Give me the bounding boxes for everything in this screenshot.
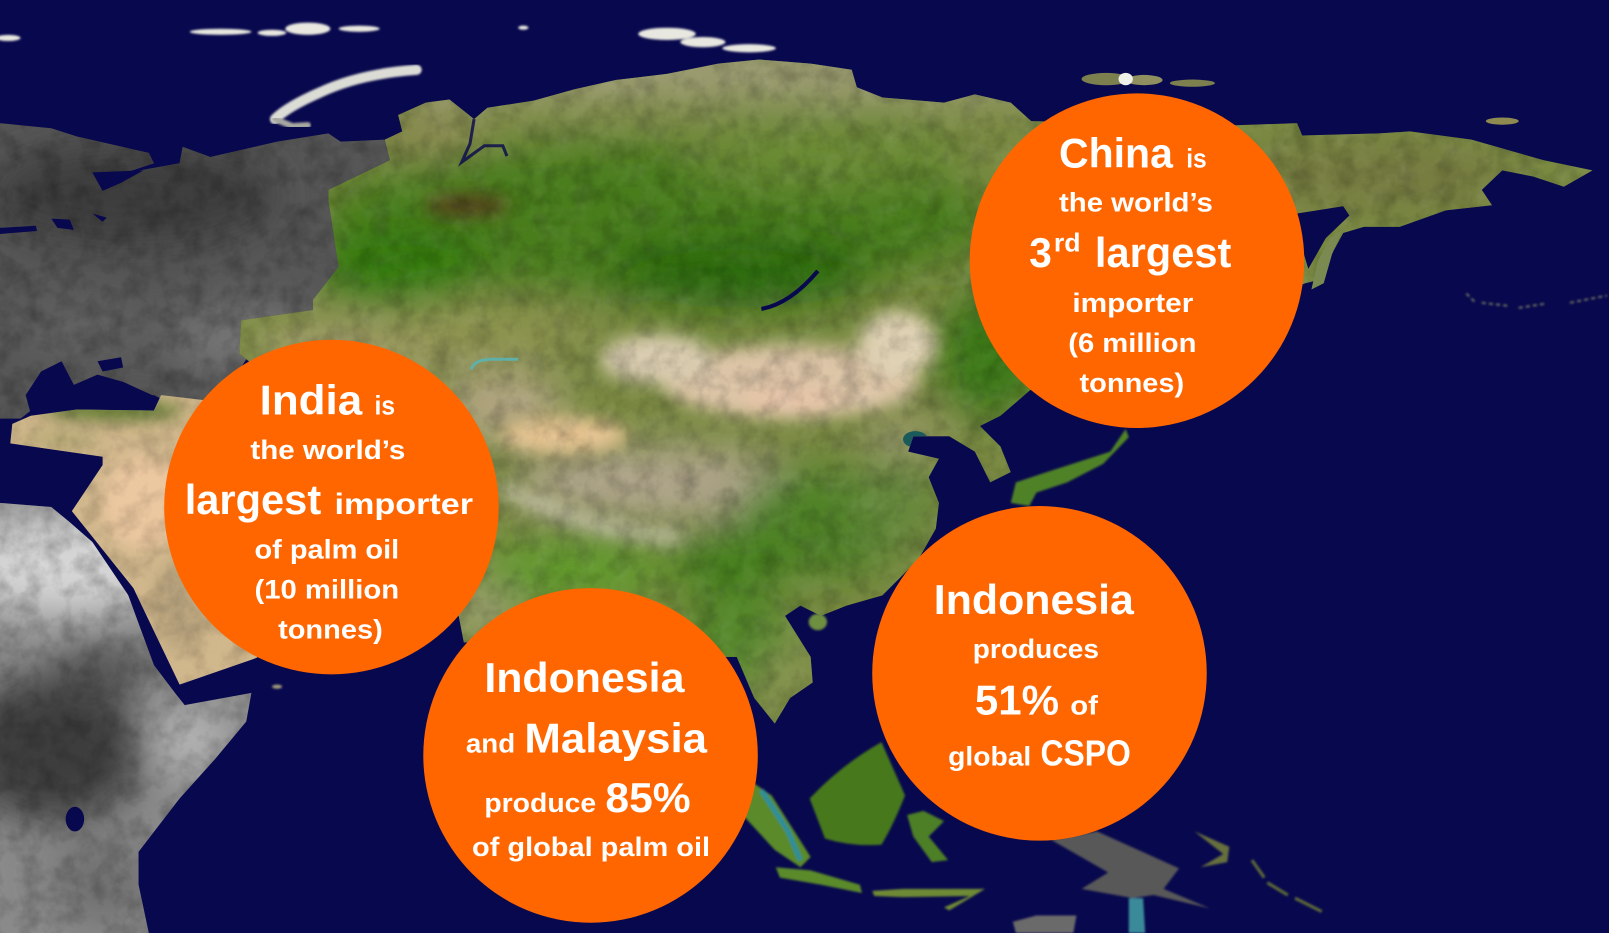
Socotra [272, 685, 282, 689]
Southeast Asian islands [272, 294, 1607, 933]
Bismarck and Solomon islands [1194, 831, 1229, 867]
Lake Baikal [761, 271, 818, 309]
text block: rd [1054, 229, 1081, 257]
text block: China [1059, 129, 1173, 176]
text block: global [948, 742, 1031, 772]
text block: of [1070, 690, 1098, 720]
Svalbard and Franz Josef ice [0, 23, 776, 52]
text block: (6 million [1068, 328, 1196, 358]
text block: is [1186, 143, 1207, 173]
Aral Sea and lakes [471, 359, 518, 370]
text block: tonnes) [1080, 368, 1184, 398]
text block: is [375, 391, 395, 421]
text block: of global palm oil [472, 832, 710, 862]
Novaya Zemlya [275, 70, 417, 119]
land: Turkey and Arabian peninsula [10, 395, 258, 684]
callout: Indonesia and Malaysia [423, 588, 758, 923]
text block: CSPO [1041, 733, 1131, 774]
callout: Indonesia CSPO [872, 506, 1207, 841]
Wrangel Island [1486, 118, 1519, 125]
Kuril islands [1466, 294, 1607, 308]
text block: the world’s [250, 435, 405, 465]
Ob gulf [462, 119, 507, 162]
Baltic Sea [0, 213, 107, 234]
land: main Asian landmass with vegetation colours [239, 60, 1592, 724]
text block: importer [335, 488, 474, 521]
text block: Indonesia [934, 576, 1135, 623]
text block: importer [1072, 288, 1193, 318]
Sumatra [739, 782, 811, 867]
New Siberian Islands [1082, 73, 1131, 85]
Northern Australia [1013, 916, 1076, 933]
Sakhalin [1311, 230, 1342, 289]
text block: the world’s [1059, 187, 1213, 217]
Sea of Azov [97, 357, 123, 372]
text block: 3 [1029, 229, 1052, 276]
text block: produce [484, 788, 596, 818]
Hainan [809, 614, 827, 630]
text block: and [466, 728, 515, 758]
text block: Malaysia [524, 714, 708, 761]
text block: India [260, 377, 363, 424]
Arctic islands [0, 23, 1519, 126]
text block [466, 654, 710, 862]
circle [970, 93, 1304, 428]
circle [872, 506, 1207, 841]
text block [934, 576, 1135, 774]
text block: Indonesia [484, 654, 685, 701]
text block: (10 million [254, 574, 399, 604]
New Guinea [1051, 831, 1210, 908]
Java and Lesser Sunda [776, 867, 862, 893]
text block [185, 377, 474, 644]
text block: 85% [605, 774, 691, 821]
Japan [1011, 429, 1129, 506]
callout: India [164, 340, 499, 674]
circle [164, 340, 499, 674]
Sea of Okhotsk channel [1297, 206, 1349, 269]
Bohai coastal teal [903, 431, 928, 448]
circle [423, 588, 758, 923]
text block: largest [185, 476, 321, 523]
land: Africa in grey [0, 493, 267, 933]
Sulawesi [907, 811, 948, 862]
text block [1029, 129, 1231, 398]
text block: largest [1095, 229, 1231, 276]
callout: China [970, 93, 1304, 428]
land: Europe in grey [0, 123, 390, 419]
Borneo [810, 742, 905, 845]
text block: 51% [975, 676, 1059, 723]
Lake Victoria [66, 807, 84, 831]
White Sea [92, 170, 144, 191]
text block: produces [973, 634, 1099, 664]
text block: of palm oil [254, 534, 399, 564]
Black Sea [26, 361, 159, 414]
text block: tonnes) [278, 614, 383, 644]
